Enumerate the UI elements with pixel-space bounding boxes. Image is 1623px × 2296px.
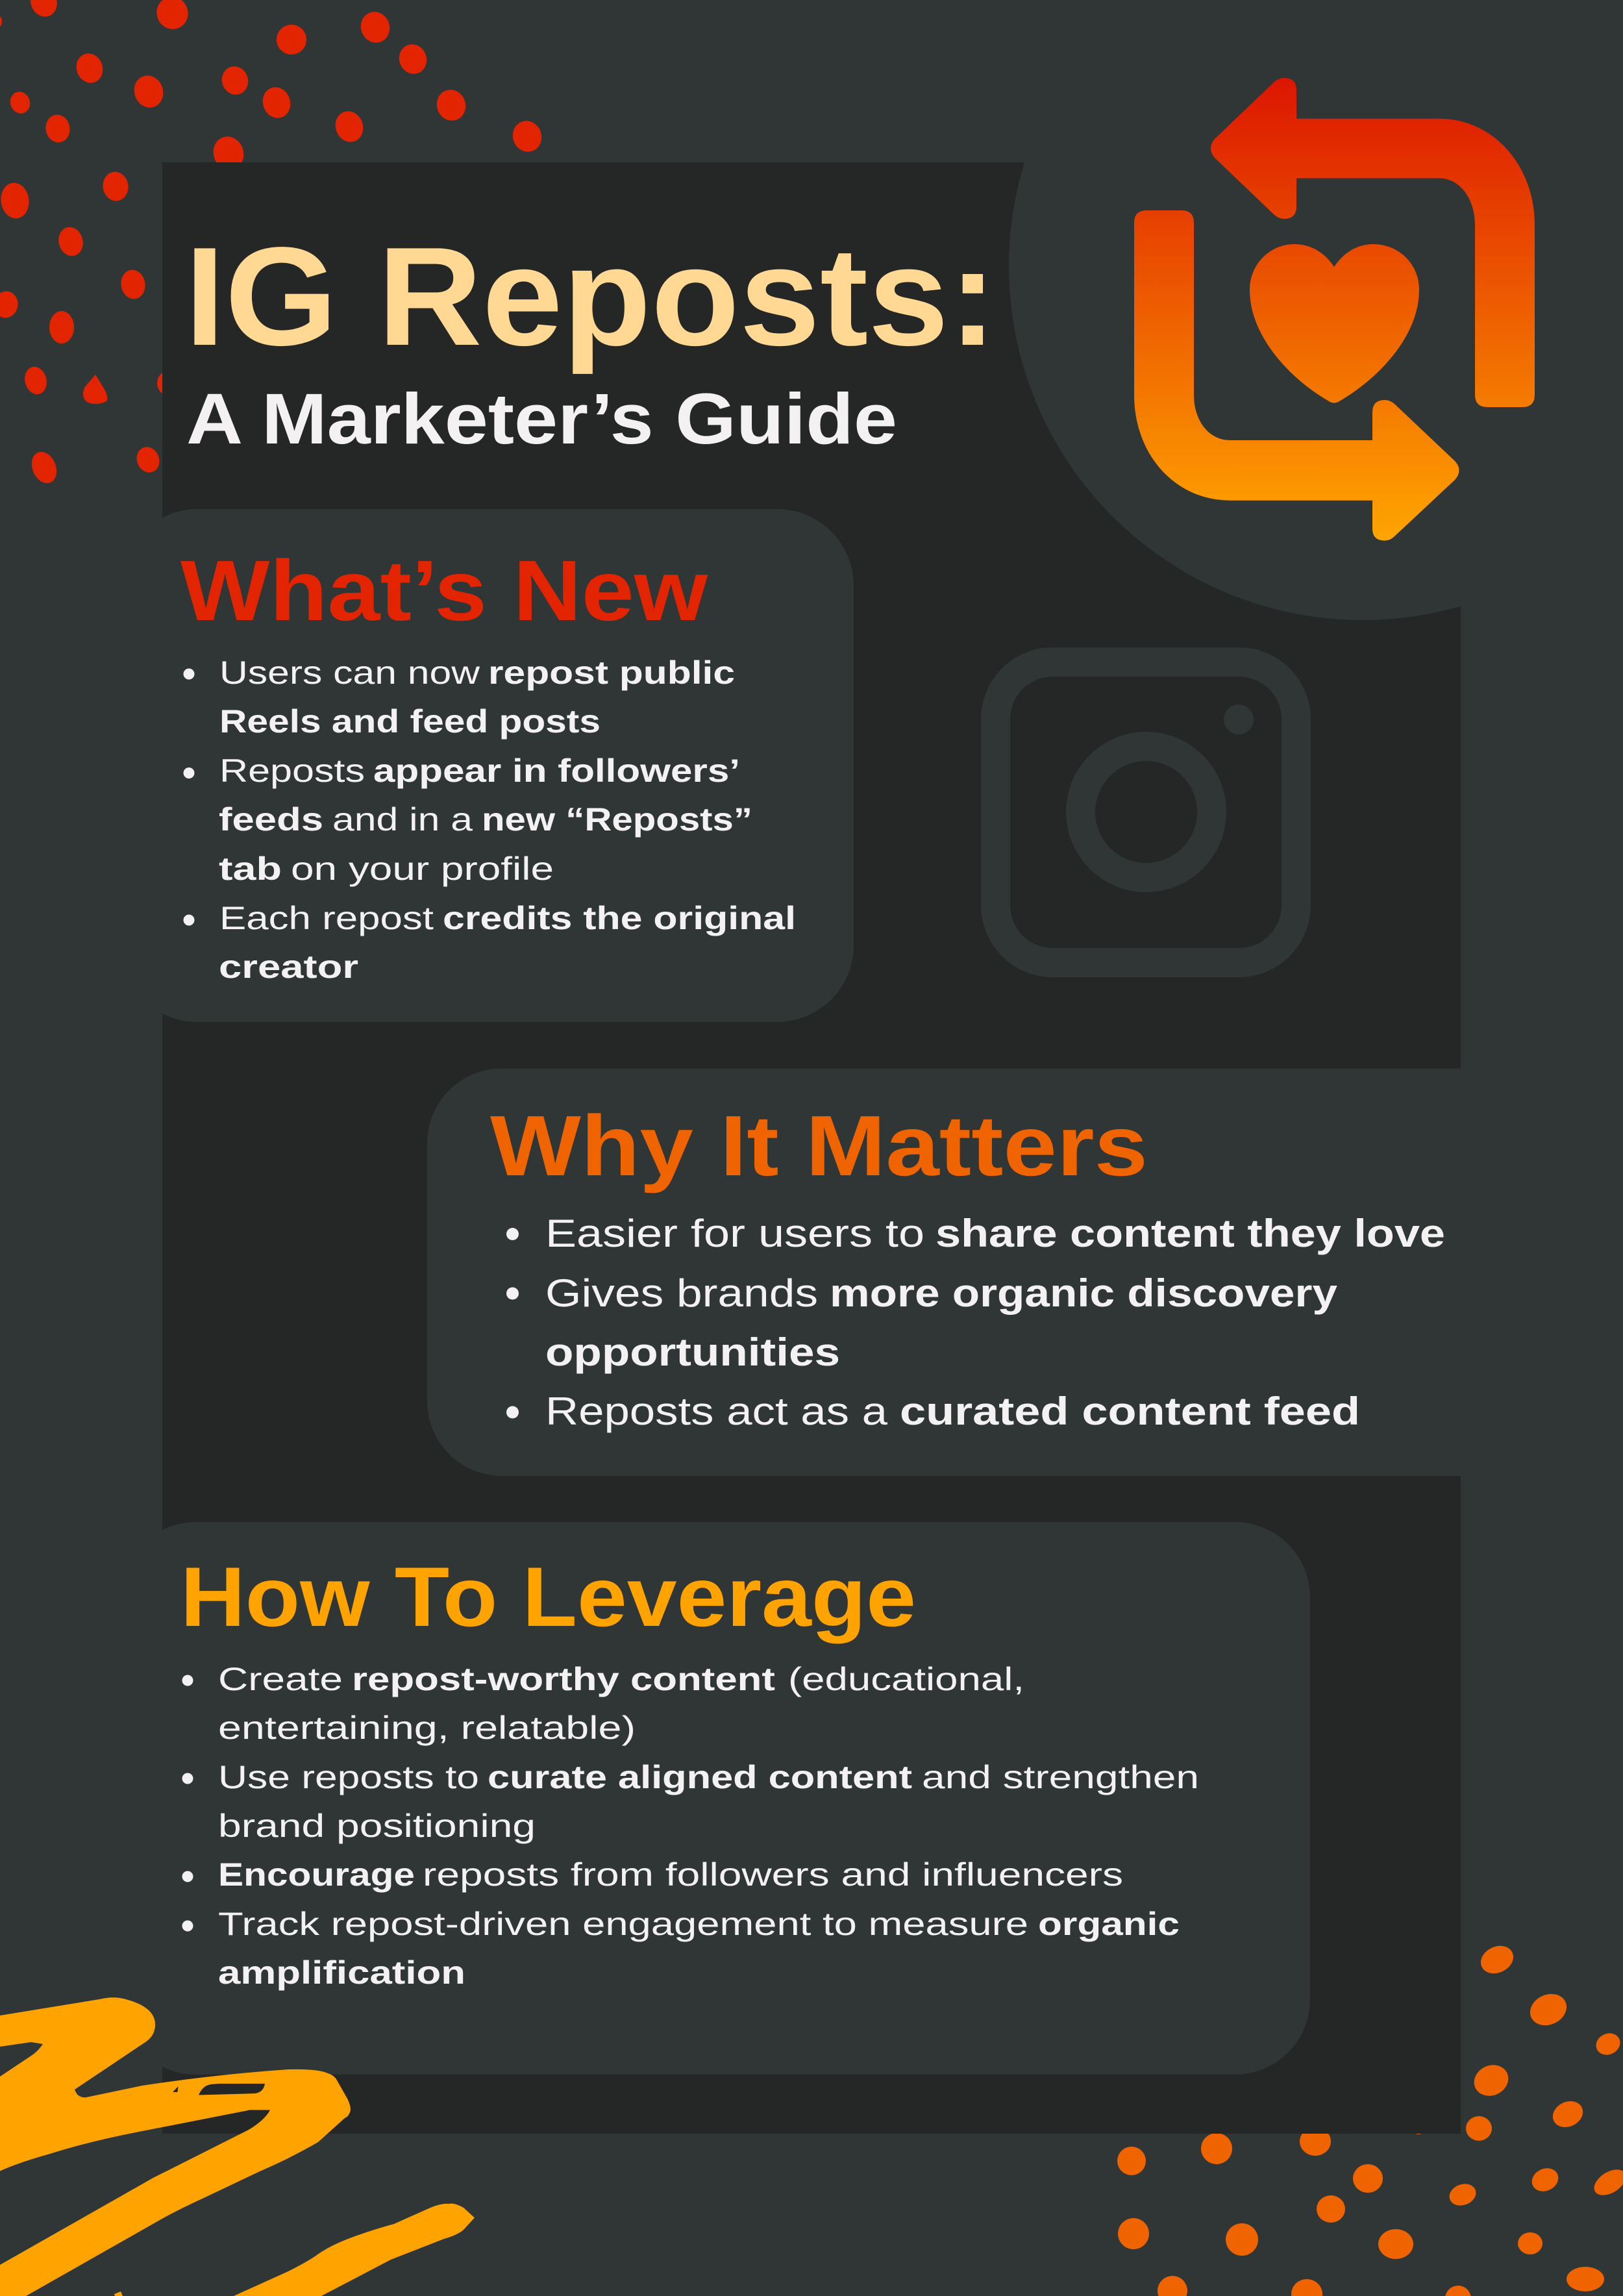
bullet: repost-worthy content: Create <box>218 1661 343 1697</box>
bullet: organic discovery: more organic discovery <box>830 1271 1338 1315</box>
panel: how to leverage <box>121 1522 1310 2075</box>
bullet: credits: creator <box>219 949 358 985</box>
bullet: credits: credits the original <box>443 900 796 936</box>
bullet: repost public <box>183 655 735 740</box>
bullet: track engagement: amplification <box>218 1954 465 1991</box>
card background <box>427 1069 1623 1476</box>
bullet: track engagement: organic <box>1038 1906 1180 1942</box>
bullet: followers feeds: feeds <box>219 801 323 838</box>
icon: instagram logo <box>996 662 1296 962</box>
bullet: curated feed <box>506 1390 1360 1433</box>
decoration: red dots top left <box>0 0 546 487</box>
icon: repost arrows with heart <box>1134 78 1535 541</box>
heart <box>1250 244 1419 403</box>
main title: IG Reposts: <box>184 218 997 375</box>
bullet: share content: Easier for users to <box>545 1212 924 1255</box>
card background <box>121 509 854 1022</box>
bullet: credits <box>183 900 796 985</box>
bullet: track engagement <box>182 1906 1180 1991</box>
bullet: share content <box>506 1212 1445 1255</box>
bullet: encourage: reposts from followers and influencers <box>423 1856 1123 1893</box>
card background <box>121 1522 1310 2075</box>
bullet: encourage <box>182 1856 1123 1893</box>
title block <box>184 218 997 459</box>
bullet: repost-worthy content: repost-worthy content <box>352 1661 775 1697</box>
bullet: followers feeds: appear in followers’ <box>373 753 740 789</box>
bullet: organic discovery: Gives brands <box>545 1271 818 1315</box>
top arrow <box>1211 78 1535 407</box>
bullet: curated feed: Reposts act as a <box>545 1390 888 1433</box>
bullet: curate aligned content: brand positioning <box>218 1808 536 1844</box>
bullet: encourage: Encourage <box>218 1856 415 1893</box>
bullet: repost public: Users can now <box>219 655 480 691</box>
bullet: followers feeds: new “Reposts” <box>482 801 752 838</box>
bullet: repost-worthy content <box>182 1661 1024 1746</box>
bullet: followers feeds: on your profile <box>291 851 554 887</box>
bullet: share content: share content they love <box>935 1212 1445 1255</box>
heading: What’s New <box>180 543 708 638</box>
bullet: followers feeds: Reposts <box>219 753 365 789</box>
subtitle: A Marketer’s Guide <box>186 379 897 459</box>
bullet: curate aligned content: and strengthen <box>922 1759 1199 1795</box>
bullet: curate aligned content <box>182 1759 1199 1844</box>
bullet: curate aligned content: curate aligned content <box>488 1759 912 1795</box>
dark main panel <box>162 162 1461 2134</box>
decoration: orange dots bottom right <box>1117 1941 1623 2296</box>
panel: why it matters <box>427 1069 1623 1476</box>
bullet: credits: Each repost <box>219 900 434 936</box>
heading: Why It Matters <box>490 1098 1148 1193</box>
bullet: organic discovery <box>506 1271 1338 1374</box>
circle behind repost icon <box>1009 0 1623 620</box>
bullet: followers feeds: tab <box>219 851 282 887</box>
bullet: repost-worthy content: (educational, <box>788 1661 1024 1697</box>
bullet: repost public: Reels and feed posts <box>219 703 601 740</box>
decoration: amber scribble bottom left <box>0 1997 475 2296</box>
bullet: followers feeds <box>183 753 752 887</box>
bullet: organic discovery: opportunities <box>545 1330 840 1374</box>
bullet: followers feeds: and in a <box>332 801 473 838</box>
heading: How To Leverage <box>180 1549 916 1644</box>
bullet: repost public: repost public <box>488 655 735 691</box>
bullet: curated feed: curated content feed <box>900 1390 1360 1433</box>
bottom arrow <box>1134 210 1459 541</box>
bullet: repost-worthy content: entertaining, relatable) <box>218 1710 636 1746</box>
bullet: curate aligned content: Use reposts to <box>218 1759 479 1795</box>
panel: what's new <box>121 509 854 1022</box>
bullet: track engagement: Track repost-driven engagement to measure <box>218 1906 1028 1942</box>
